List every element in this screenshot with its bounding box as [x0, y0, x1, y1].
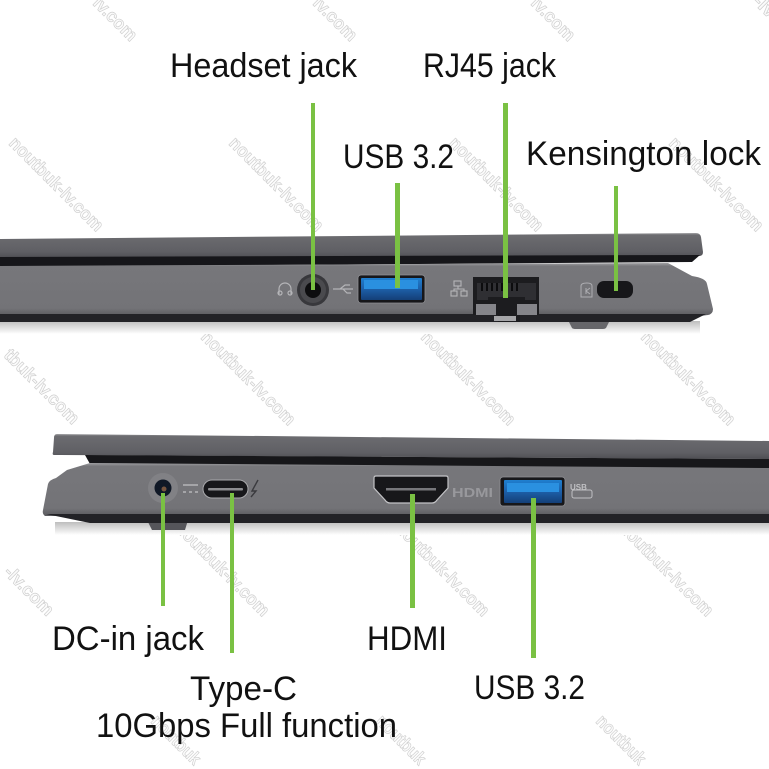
shadow: [0, 321, 700, 334]
foot: [568, 320, 610, 329]
hinge gap: [85, 455, 769, 469]
callout line: headset jack: [311, 103, 315, 290]
label: usb 3.2 top: USB 3.2: [343, 138, 454, 176]
headset jack: [297, 274, 329, 306]
label: dc-in jack: DC-in jack: [52, 620, 205, 658]
callout line: rj45 jack: [503, 103, 508, 298]
callout line: usb 3.2 top: [395, 183, 400, 288]
watermarks: -lv.com: [0, 562, 58, 620]
watermarks: noutbuk-lv.com: [417, 327, 520, 429]
watermarks: noutbuk-lv.com: [171, 518, 274, 620]
usb symbol: [333, 285, 353, 293]
label: type-c: Type-C: [190, 670, 297, 708]
lid: [0, 233, 703, 258]
watermarks: noutbuk-lv.com: [637, 327, 740, 429]
hdmi port: [374, 476, 448, 503]
usb 3.2 port: [358, 275, 425, 303]
type-c port: [203, 480, 248, 498]
callout line: hdmi: [410, 494, 415, 608]
laptop: right side view: [0, 233, 713, 334]
label: usb 3.2 bottom: USB 3.2: [474, 669, 585, 707]
label: 10gbps full function: 10Gbps Full function: [96, 707, 397, 745]
usb logo: USB: [570, 483, 587, 492]
network icon: [451, 281, 467, 296]
thunderbolt icon: [251, 480, 258, 497]
label: headset jack: Headset jack: [170, 47, 358, 85]
kensington lock slot: [597, 281, 633, 298]
kensington icon: [581, 283, 592, 297]
label: hdmi: HDMI: [367, 620, 447, 658]
body: [0, 263, 713, 316]
shadow: [55, 522, 769, 535]
watermarks: noutbuk-lv.com: [225, 133, 328, 235]
watermarks: noutbuk-lv.com: [197, 327, 300, 429]
watermarks: noutbuk-lv.com: [615, 518, 718, 620]
watermarks: noutbuk-lv.com: [391, 518, 494, 620]
laptop: left side view: [43, 434, 769, 535]
callout line: usb 3.2 bottom: [531, 498, 536, 658]
callout line: kensington lock: [614, 186, 618, 291]
callout line: type-c: [230, 493, 234, 653]
hinge gap: [0, 255, 700, 267]
hdmi logo: HDMI: [452, 485, 493, 500]
watermarks: noutbuk-lv.com: [445, 133, 548, 235]
bottom edge: [0, 314, 706, 322]
lid: [53, 434, 769, 459]
dc symbol: [183, 485, 198, 492]
headset icon: [278, 283, 292, 295]
callout line: dc-in jack: [161, 493, 165, 606]
label: kensington lock: Kensington lock: [526, 135, 762, 173]
body: [43, 463, 769, 516]
rj45 port: [473, 277, 539, 322]
dc-in jack: [148, 473, 178, 503]
label: rj45 jack: RJ45 jack: [423, 47, 557, 85]
bottom edge: [46, 514, 769, 523]
watermarks: noutbuk-lv.com: [5, 133, 108, 235]
foot: [147, 520, 188, 530]
usb 3.2 port: [500, 477, 565, 506]
usb logo: [570, 483, 592, 498]
watermarks: tbuk-lv.com: [0, 345, 84, 428]
